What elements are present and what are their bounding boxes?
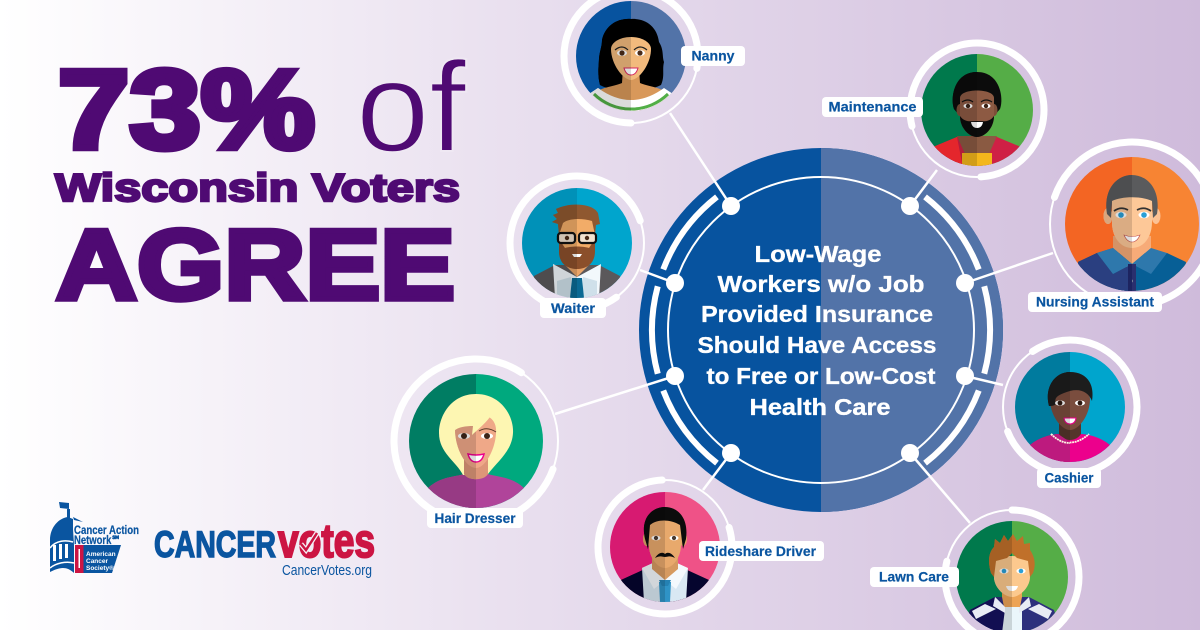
headline: Wisconsin Voters: Wisconsin Voters xyxy=(55,167,460,210)
label: Nanny: Nanny xyxy=(692,48,735,64)
label: Maintenance: Maintenance xyxy=(828,100,917,114)
central statement: Workers w/o Job xyxy=(718,271,924,297)
circle right half xyxy=(821,148,1003,512)
central statement: to Free or Low-Cost xyxy=(706,363,936,389)
logo text: Cancer Action xyxy=(74,525,139,537)
label: Rideshare Driver xyxy=(699,541,824,561)
logo text: American xyxy=(86,551,116,558)
icon: capitol dome xyxy=(50,502,121,573)
headline xyxy=(55,36,466,320)
headline: 73%: 73% xyxy=(58,47,315,172)
logo: Cancer Action Network xyxy=(50,502,139,573)
ring xyxy=(977,314,1163,500)
avatar: Nursing Assistant xyxy=(1049,138,1200,304)
ring xyxy=(483,149,671,337)
inner thin ring xyxy=(668,177,974,483)
portrait xyxy=(1065,157,1199,294)
ring xyxy=(1028,120,1200,328)
ring xyxy=(581,463,749,630)
label: Hair Dresser: Hair Dresser xyxy=(434,511,516,526)
central statement: Low-Wage xyxy=(754,241,882,267)
node dots xyxy=(666,197,974,462)
avatar: Waiter xyxy=(506,172,645,308)
central statement: Health Care xyxy=(750,394,890,420)
icon: check mark xyxy=(301,533,317,550)
ring xyxy=(896,29,1058,191)
label: Nursing Assistant: Nursing Assistant xyxy=(1036,294,1155,310)
circle left half xyxy=(639,148,1003,512)
outer arc segments xyxy=(584,93,1058,567)
ring xyxy=(945,510,1079,630)
label: Lawn Care xyxy=(870,567,959,587)
label: Nursing Assistant xyxy=(1028,292,1162,312)
label: Lawn Care: Lawn Care xyxy=(879,570,949,584)
url: CancerVotes.org xyxy=(282,563,372,579)
central statement: Provided Insurance xyxy=(701,301,933,327)
label: Cashier: Cashier xyxy=(1044,470,1094,486)
ring xyxy=(564,0,698,123)
portrait xyxy=(1015,352,1125,467)
bangs xyxy=(454,414,490,435)
portrait xyxy=(956,521,1068,630)
logo text: Cancer xyxy=(86,558,109,565)
central statement xyxy=(698,241,936,420)
headline: AGREE: AGREE xyxy=(56,209,455,320)
avatar: Maintenance xyxy=(906,40,1048,180)
logo: CancerVotes xyxy=(154,514,375,579)
label: Hair Dresser xyxy=(427,508,523,528)
label: Waiter xyxy=(540,298,606,318)
label: Cashier xyxy=(1037,468,1101,488)
panel: central circle xyxy=(554,112,1054,524)
hair xyxy=(439,394,513,475)
portrait xyxy=(610,492,720,607)
portrait xyxy=(522,188,632,303)
logo text xyxy=(74,525,139,572)
logo text: Society® xyxy=(86,564,114,572)
label: Nanny xyxy=(681,46,745,66)
avatar: Lawn Care xyxy=(945,510,1079,630)
portrait xyxy=(576,1,686,116)
portrait xyxy=(921,54,1033,170)
avatar: Cashier xyxy=(1002,336,1140,470)
avatar: Rideshare Driver xyxy=(594,476,736,618)
connector lines xyxy=(555,113,1053,523)
logo text: Network℠ xyxy=(74,535,121,547)
wordmark: votes: votes xyxy=(278,514,375,567)
ring xyxy=(371,336,581,546)
headline: of: of xyxy=(356,36,466,179)
label: Rideshare Driver: Rideshare Driver xyxy=(705,544,817,559)
portrait xyxy=(409,374,543,511)
avatar: Hair Dresser xyxy=(390,356,559,512)
avatar: Nanny xyxy=(564,0,698,123)
wordmark: CANCER: CANCER xyxy=(154,524,276,565)
central statement: Should Have Access xyxy=(698,332,936,358)
label: Waiter: Waiter xyxy=(551,301,596,316)
label: Maintenance xyxy=(822,97,923,117)
